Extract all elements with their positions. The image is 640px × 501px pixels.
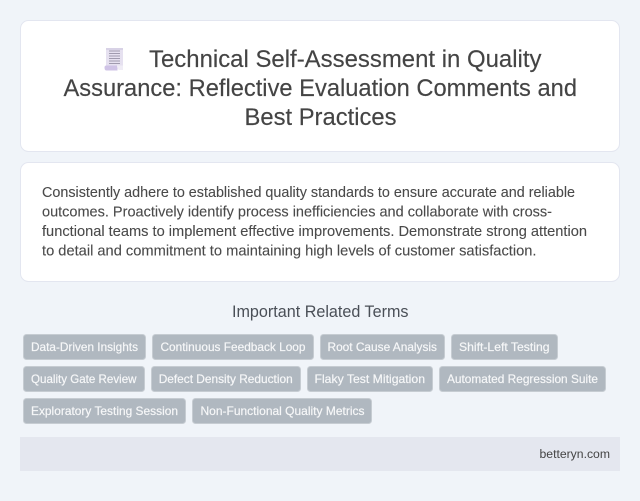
summary text: to detail and commitment to maintaining high levels of customer satisfaction. bbox=[42, 244, 536, 260]
tag: Data-Driven Insights: Data-Driven Insights bbox=[31, 340, 138, 354]
tag: Non-Functional Quality Metrics bbox=[192, 398, 372, 424]
tag: Defect Density Reduction: Defect Density Reduction bbox=[159, 372, 293, 386]
title bbox=[64, 46, 577, 131]
tag: Continuous Feedback Loop: Continuous Feedback Loop bbox=[160, 340, 306, 354]
tag: Continuous Feedback Loop bbox=[152, 334, 314, 360]
summary text: functional teams to implement effective improvements. Demonstrate strong attention bbox=[42, 224, 587, 240]
summary text bbox=[42, 185, 587, 260]
tag: Root Cause Analysis: Root Cause Analysis bbox=[328, 340, 437, 354]
tag: Non-Functional Quality Metrics: Non-Functional Quality Metrics bbox=[200, 404, 364, 418]
footer bbox=[20, 437, 620, 471]
panel: summary card bbox=[20, 162, 620, 282]
tag: Automated Regression Suite bbox=[440, 366, 606, 392]
tag: Root Cause Analysis bbox=[320, 334, 444, 360]
tag: Exploratory Testing Session: Exploratory Testing Session bbox=[31, 404, 178, 418]
tag: Shift-Left Testing: Shift-Left Testing bbox=[459, 340, 550, 354]
tag: Defect Density Reduction bbox=[152, 366, 300, 392]
summary text: Consistently adhere to established quality standards to ensure accurate and reliable bbox=[42, 185, 575, 201]
title: Technical Self-Assessment in Quality bbox=[149, 46, 542, 73]
tag: Quality Gate Review bbox=[24, 366, 144, 392]
footer text: site name: betteryn.com bbox=[540, 447, 610, 461]
tag: Shift-Left Testing bbox=[452, 334, 558, 360]
title: Best Practices bbox=[244, 104, 396, 131]
tag: Data-Driven Insights bbox=[24, 334, 146, 360]
panel: title card bbox=[20, 20, 620, 152]
summary text: outcomes. Proactively identify process inefficiencies and collaborate with cross- bbox=[42, 204, 552, 220]
tag list bbox=[24, 334, 606, 424]
tag: Flaky Test Mitigation bbox=[308, 366, 432, 392]
heading: related terms: Important Related Terms bbox=[232, 303, 408, 321]
tag: Flaky Test Mitigation: Flaky Test Mitigation bbox=[314, 372, 425, 386]
tag: Exploratory Testing Session bbox=[24, 398, 186, 424]
tag: Quality Gate Review: Quality Gate Review bbox=[31, 372, 137, 386]
icon: document scroll bbox=[104, 48, 123, 70]
title: Assurance: Reflective Evaluation Comments and bbox=[64, 75, 577, 102]
tag: Automated Regression Suite: Automated Regression Suite bbox=[447, 372, 598, 386]
